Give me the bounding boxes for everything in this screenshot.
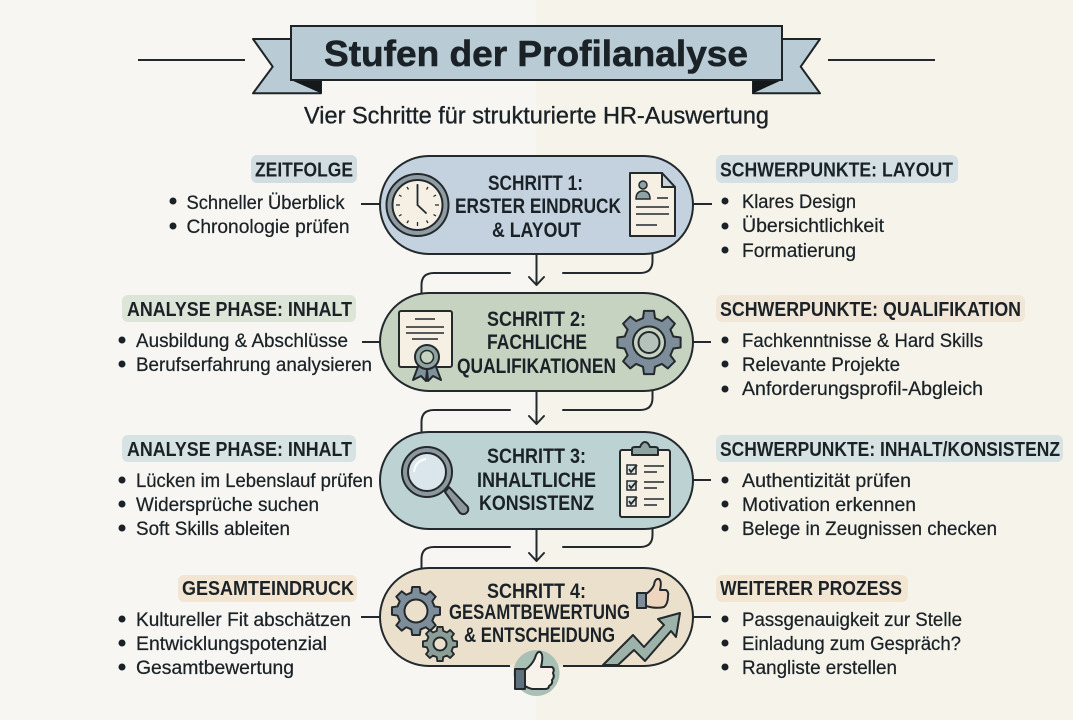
- step 4 pill: [380, 568, 693, 696]
- row 1 left: Zeitfolge: Chronologie prüfen: [186, 216, 350, 238]
- row 2 left: Analyse Phase Inhalt: [118, 295, 380, 376]
- row 2 right: Schwerpunkte Qualifikation: [693, 295, 1025, 400]
- row 1 left: Zeitfolge: [170, 155, 380, 238]
- row 4 right: Weiterer Prozess: Rangliste erstellen: [742, 657, 897, 679]
- row 4 left: Gesamteindruck: GESAMTEINDRUCK: [182, 577, 354, 600]
- row 3 left: Analyse Phase Inhalt: Widersprüche suchen: [136, 494, 319, 516]
- row 3 right: Schwerpunkte Inhalt/Konsistenz: [693, 435, 1063, 540]
- row 3 left: Analyse Phase Inhalt: [118, 435, 373, 540]
- step 2 label: [457, 308, 616, 378]
- step 4 label: GESAMTBEWERTUNG: [449, 601, 630, 624]
- subtitle: Vier Schritte für strukturierte HR-Auswertung: [304, 102, 769, 130]
- step 1 label: ERSTER EINDRUCK: [455, 195, 621, 218]
- row 1 right: Schwerpunkte Layout: Klares Design: [742, 191, 856, 213]
- flow connector: step 1 to step 2: [422, 254, 652, 293]
- row 4 right: Weiterer Prozess: WEITERER PROZESS: [720, 577, 902, 600]
- step 2 pill: [380, 293, 693, 391]
- title banner: [138, 26, 935, 93]
- flow connector: step 3 to step 4: [422, 529, 652, 568]
- row 3 right: Schwerpunkte Inhalt/Konsistenz: Belege in Zeugnissen checken: [742, 518, 997, 540]
- icon: two gears: [392, 587, 457, 661]
- row 3 right: Schwerpunkte Inhalt/Konsistenz: Motivation erkennen: [742, 494, 916, 516]
- row 3 left: Analyse Phase Inhalt: Soft Skills ableiten: [136, 518, 290, 540]
- row 2 right: Schwerpunkte Qualifikation: Relevante Projekte: [742, 354, 900, 376]
- row 3 left: Analyse Phase Inhalt: Lücken im Lebenslauf prüfen: [136, 470, 373, 492]
- step 1 label: SCHRITT 1:: [488, 172, 583, 195]
- step 3 label: SCHRITT 3:: [487, 445, 586, 468]
- row 3 right: Schwerpunkte Inhalt/Konsistenz: Authentizität prüfen: [742, 470, 911, 492]
- step 1 label: & LAYOUT: [492, 219, 581, 242]
- row 2 right: Schwerpunkte Qualifikation: Anforderungsprofil-Abgleich: [742, 378, 983, 400]
- title: Stufen der Profilanalyse: [324, 33, 748, 74]
- icon: certificate: [399, 311, 452, 381]
- step 2 label: SCHRITT 2:: [487, 308, 586, 331]
- step 2 label: FACHLICHE: [487, 331, 587, 354]
- row 2 left: Analyse Phase Inhalt: ANALYSE PHASE: INHALT: [127, 298, 352, 321]
- step 1 label: [455, 172, 621, 242]
- row 1 right: Schwerpunkte Layout: [693, 155, 958, 262]
- row 1 right: Schwerpunkte Layout: Übersichtlichkeit: [742, 215, 885, 237]
- icon: gear: [617, 311, 681, 374]
- row 1 right: Schwerpunkte Layout: Formatierung: [742, 240, 856, 262]
- row 4 right: Weiterer Prozess: Passgenauigkeit zur Stelle: [742, 609, 962, 631]
- step 3 label: INHALTLICHE: [477, 469, 596, 492]
- icon: resume document: [630, 173, 675, 236]
- icon: thumbs up badge: [510, 650, 563, 696]
- step 2 label: QUALIFIKATIONEN: [457, 355, 616, 378]
- row 4 left: Gesamteindruck: Entwicklungspotenzial: [136, 633, 327, 655]
- step 1 pill: [380, 156, 693, 254]
- icon: thumbs up small: [637, 579, 668, 608]
- step 3 label: [477, 445, 596, 515]
- row 2 left: Analyse Phase Inhalt: Berufserfahrung analysieren: [136, 354, 372, 376]
- row 1 right: Schwerpunkte Layout: SCHWERPUNKTE: LAYOUT: [720, 158, 953, 182]
- flow connector: step 2 to step 3: [422, 391, 652, 432]
- row 2 left: Analyse Phase Inhalt: Ausbildung & Abschlüsse: [136, 330, 348, 352]
- row 2 right: Schwerpunkte Qualifikation: Fachkenntnisse & Hard Skills: [742, 330, 983, 352]
- step 3 pill: [380, 432, 693, 529]
- step 4 label: & ENTSCHEIDUNG: [464, 624, 615, 647]
- row 3 left: Analyse Phase Inhalt: ANALYSE PHASE: INHALT: [127, 438, 352, 461]
- row 4 left: Gesamteindruck: Kultureller Fit abschätzen: [136, 609, 351, 631]
- step 4 label: [449, 580, 630, 647]
- step 4 label: SCHRITT 4:: [487, 580, 586, 603]
- icon: magnifying glass: [402, 447, 468, 514]
- row 1 left: Zeitfolge: Schneller Überblick: [186, 192, 345, 214]
- row 4 left: Gesamteindruck: Gesamtbewertung: [136, 657, 294, 679]
- row 2 right: Schwerpunkte Qualifikation: SCHWERPUNKTE: QUALIFIKATION: [720, 298, 1021, 321]
- row 4 left: Gesamteindruck: [118, 575, 380, 679]
- step 3 label: KONSISTENZ: [479, 492, 594, 515]
- icon: clock: [386, 174, 448, 236]
- icon: rising arrow: [603, 613, 680, 665]
- icon: checklist clipboard: [620, 442, 670, 517]
- row 1 left: Zeitfolge: ZEITFOLGE: [255, 158, 353, 182]
- row 4 right: Weiterer Prozess: [693, 575, 962, 679]
- row 4 right: Weiterer Prozess: Einladung zum Gespräch?: [742, 633, 961, 655]
